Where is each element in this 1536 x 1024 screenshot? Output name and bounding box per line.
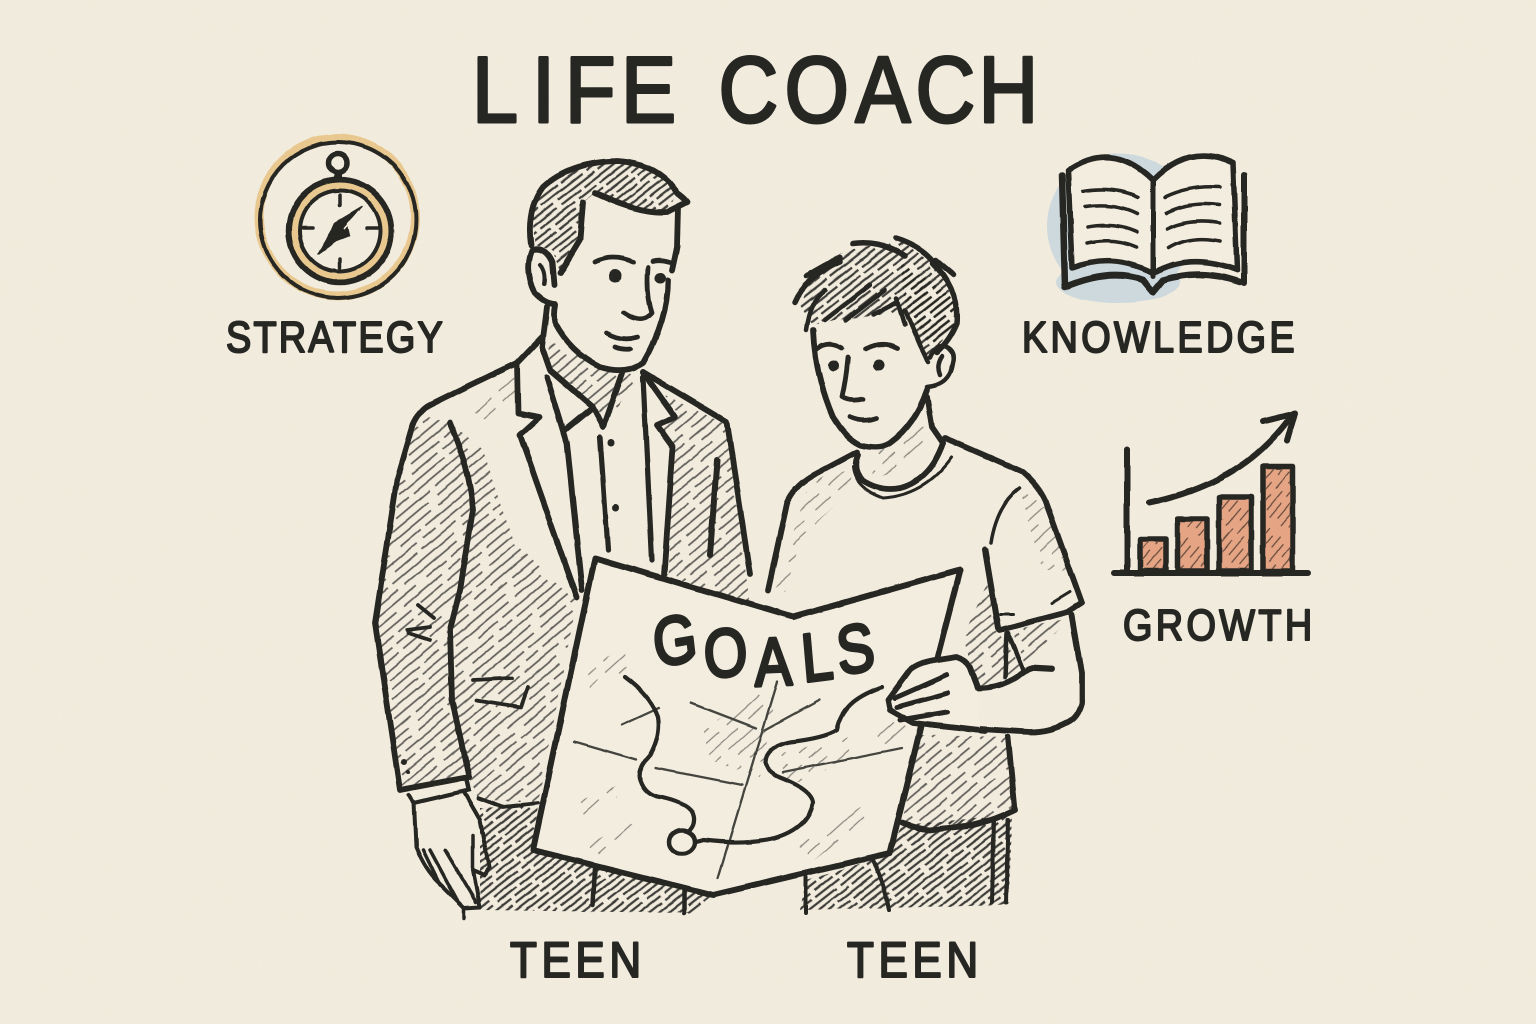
label: knowledge: KNOWLEDGE — [1022, 312, 1295, 362]
head — [530, 161, 687, 245]
shirt — [927, 397, 943, 443]
shirt and hair hatching — [775, 240, 1070, 910]
illustration: coach and teen with map — [375, 161, 1082, 918]
teen hand on map — [888, 657, 985, 731]
label: strategy: STRATEGY — [226, 312, 443, 362]
figure: life coach — [375, 161, 750, 918]
jacket and shirt — [542, 307, 622, 430]
icon: compass — [259, 138, 416, 298]
title: LIFE COACH — [472, 37, 1038, 142]
label: teen right: TEEN — [847, 931, 978, 988]
head — [795, 238, 957, 352]
trousers — [593, 868, 684, 913]
map text: goals: GOALS — [649, 600, 878, 701]
jacket hatching — [375, 161, 750, 913]
route to goal — [693, 687, 882, 843]
label: teen left: TEEN — [510, 931, 641, 988]
map hatching — [580, 650, 907, 860]
hand — [414, 792, 489, 908]
map creases — [574, 682, 902, 878]
pocket and sleeve creases — [407, 605, 538, 807]
figure: teen — [768, 238, 1082, 913]
map: goals — [533, 558, 960, 895]
icon: open book — [1047, 153, 1244, 303]
label: growth: GROWTH — [1123, 600, 1312, 650]
icon: growth chart — [1114, 413, 1308, 573]
